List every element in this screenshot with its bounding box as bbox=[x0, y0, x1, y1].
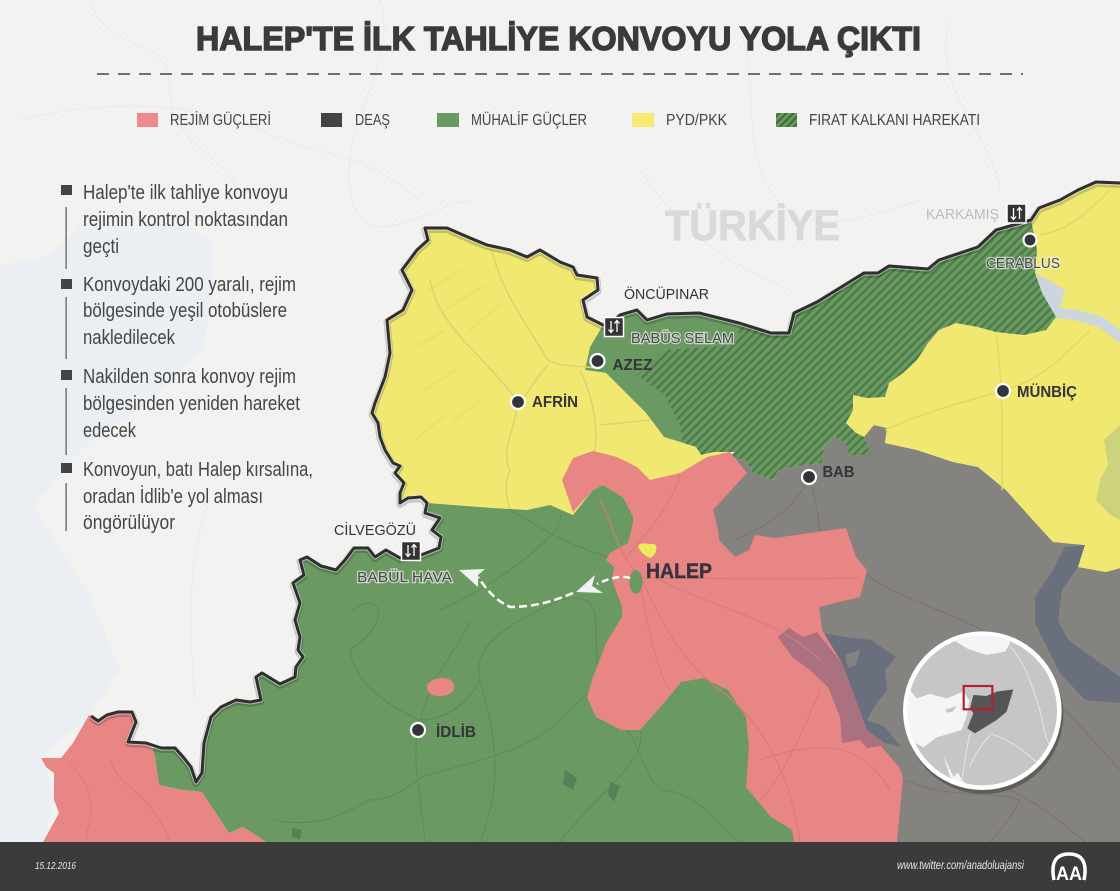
black sea bbox=[956, 636, 1010, 655]
Idlib red pocket bbox=[427, 678, 454, 696]
territory: Rejim Halep (red) bbox=[562, 451, 903, 842]
mediterranean bbox=[908, 690, 970, 748]
faint roads on background bbox=[20, 0, 1000, 700]
icon: AA logo bbox=[1053, 854, 1085, 885]
sea bbox=[0, 225, 213, 842]
bullet 4: öngörülüyor bbox=[83, 512, 175, 534]
city: İdlib bbox=[411, 723, 476, 741]
legend item: deaş bbox=[321, 112, 390, 129]
city: Afrin bbox=[511, 393, 578, 411]
territory: Muhalif Idlib (green) bbox=[152, 485, 800, 842]
city: Halep: HALEP bbox=[646, 560, 712, 583]
footer bar bbox=[0, 842, 1120, 891]
dashed divider bbox=[97, 73, 1023, 75]
label: Karkamış: KARKAMIŞ bbox=[926, 206, 999, 223]
date: 15.12.2016 bbox=[35, 861, 76, 872]
legend item: deaş: DEAŞ bbox=[355, 112, 390, 129]
city: Afrin: AFRİN bbox=[532, 393, 578, 411]
icon: Öncüpınar crossing bbox=[604, 318, 624, 336]
label: Türkiye: TÜRKİYE bbox=[665, 202, 840, 250]
bullet 4: oradan İdlib'e yol alması bbox=[83, 485, 263, 508]
territory: Fırat Kalkanı (hatched green) bbox=[585, 222, 1056, 480]
city: Azez: AZEZ bbox=[612, 357, 653, 374]
title: HALEP'TE İLK TAHLİYE KONVOYU YOLA ÇIKTI bbox=[196, 20, 921, 57]
label: Cilvegözü: CİLVEGÖZÜ bbox=[334, 521, 416, 539]
bullet 3: Nakilden sonra konvoy rejim bbox=[83, 366, 296, 388]
bullet 3: bölgesinden yeniden hareket bbox=[83, 393, 300, 415]
city: Azez bbox=[590, 354, 653, 374]
city: Cerablus bbox=[986, 234, 1060, 272]
Syria bbox=[967, 689, 1013, 733]
label: Babüs Selam: BABÜS SELAM bbox=[631, 329, 734, 347]
region marker bbox=[964, 686, 992, 709]
legend item: pyd: PYD/PKK bbox=[666, 112, 727, 129]
icon: Cilvegözü crossing bbox=[402, 542, 420, 560]
icon: AA logo: AA bbox=[1056, 864, 1082, 885]
city: Bab bbox=[802, 464, 854, 484]
twitter url: www.twitter.com/anadoluajansi bbox=[897, 860, 1024, 872]
Halep yellow pocket bbox=[638, 543, 657, 558]
bullet 2: Konvoydaki 200 yaralı, rejim bbox=[83, 274, 296, 296]
territory: PYD/PKK east (yellow) bbox=[846, 182, 1120, 572]
legend item: pyd bbox=[632, 112, 727, 129]
legend item: rejim: REJİM GÜÇLERİ bbox=[170, 110, 271, 129]
bullet 1: Halep'te ilk tahliye konvoyu bbox=[83, 182, 288, 204]
arrow: convoy route bbox=[459, 569, 630, 607]
city: Münbiç: MÜNBİÇ bbox=[1017, 382, 1077, 401]
territory: DEAŞ (grey) bbox=[700, 425, 1120, 842]
territory: PYD/PKK Afrin (yellow) bbox=[372, 228, 730, 515]
legend bbox=[137, 110, 980, 129]
city: Cerablus: CERABLUS bbox=[986, 255, 1060, 272]
city: Münbiç bbox=[996, 382, 1077, 401]
legend item: muhalif: MÜHALİF GÜÇLER bbox=[471, 110, 587, 129]
inset locator map bbox=[900, 630, 1067, 797]
bullet 3 bbox=[61, 366, 300, 455]
bullet 1: rejimin kontrol noktasından bbox=[83, 209, 288, 231]
city: İdlib: İDLİB bbox=[436, 723, 476, 741]
bullet 4 bbox=[61, 459, 313, 534]
label: Babül Hava: BABÜL HAVA bbox=[357, 568, 452, 586]
lake Jabbul bbox=[821, 633, 901, 747]
lake east bbox=[1035, 545, 1120, 703]
bullet 2: bölgesinde yeşil otobüslere bbox=[83, 300, 287, 322]
bullet list bbox=[61, 182, 313, 534]
city: Bab: BAB bbox=[822, 464, 854, 481]
legend item: fırat kalkanı: FIRAT KALKANI HAREKATI bbox=[809, 112, 980, 129]
Halep green pocket bbox=[630, 570, 642, 594]
bullet 2 bbox=[61, 274, 296, 359]
bullet 1 bbox=[61, 182, 288, 269]
icon: Karkamış crossing bbox=[1007, 204, 1026, 223]
bullet 2: nakledilecek bbox=[83, 327, 176, 349]
Euphrates lake bbox=[1035, 273, 1120, 343]
legend item: muhalif bbox=[437, 110, 587, 129]
dark ponds bbox=[563, 770, 620, 802]
bullet 3: edecek bbox=[83, 420, 137, 442]
Jabbul over the regime area bbox=[778, 628, 887, 748]
legend item: rejim bbox=[137, 110, 271, 129]
Turkey-Syria border bbox=[91, 182, 1120, 784]
label: Öncüpınar: ÖNCÜPINAR bbox=[624, 285, 709, 303]
territory: Rejim Lazkiye (red) bbox=[41, 712, 266, 842]
bullet 1: geçti bbox=[83, 236, 119, 258]
bullet 4: Konvoyun, batı Halep kırsalına, bbox=[83, 459, 313, 481]
